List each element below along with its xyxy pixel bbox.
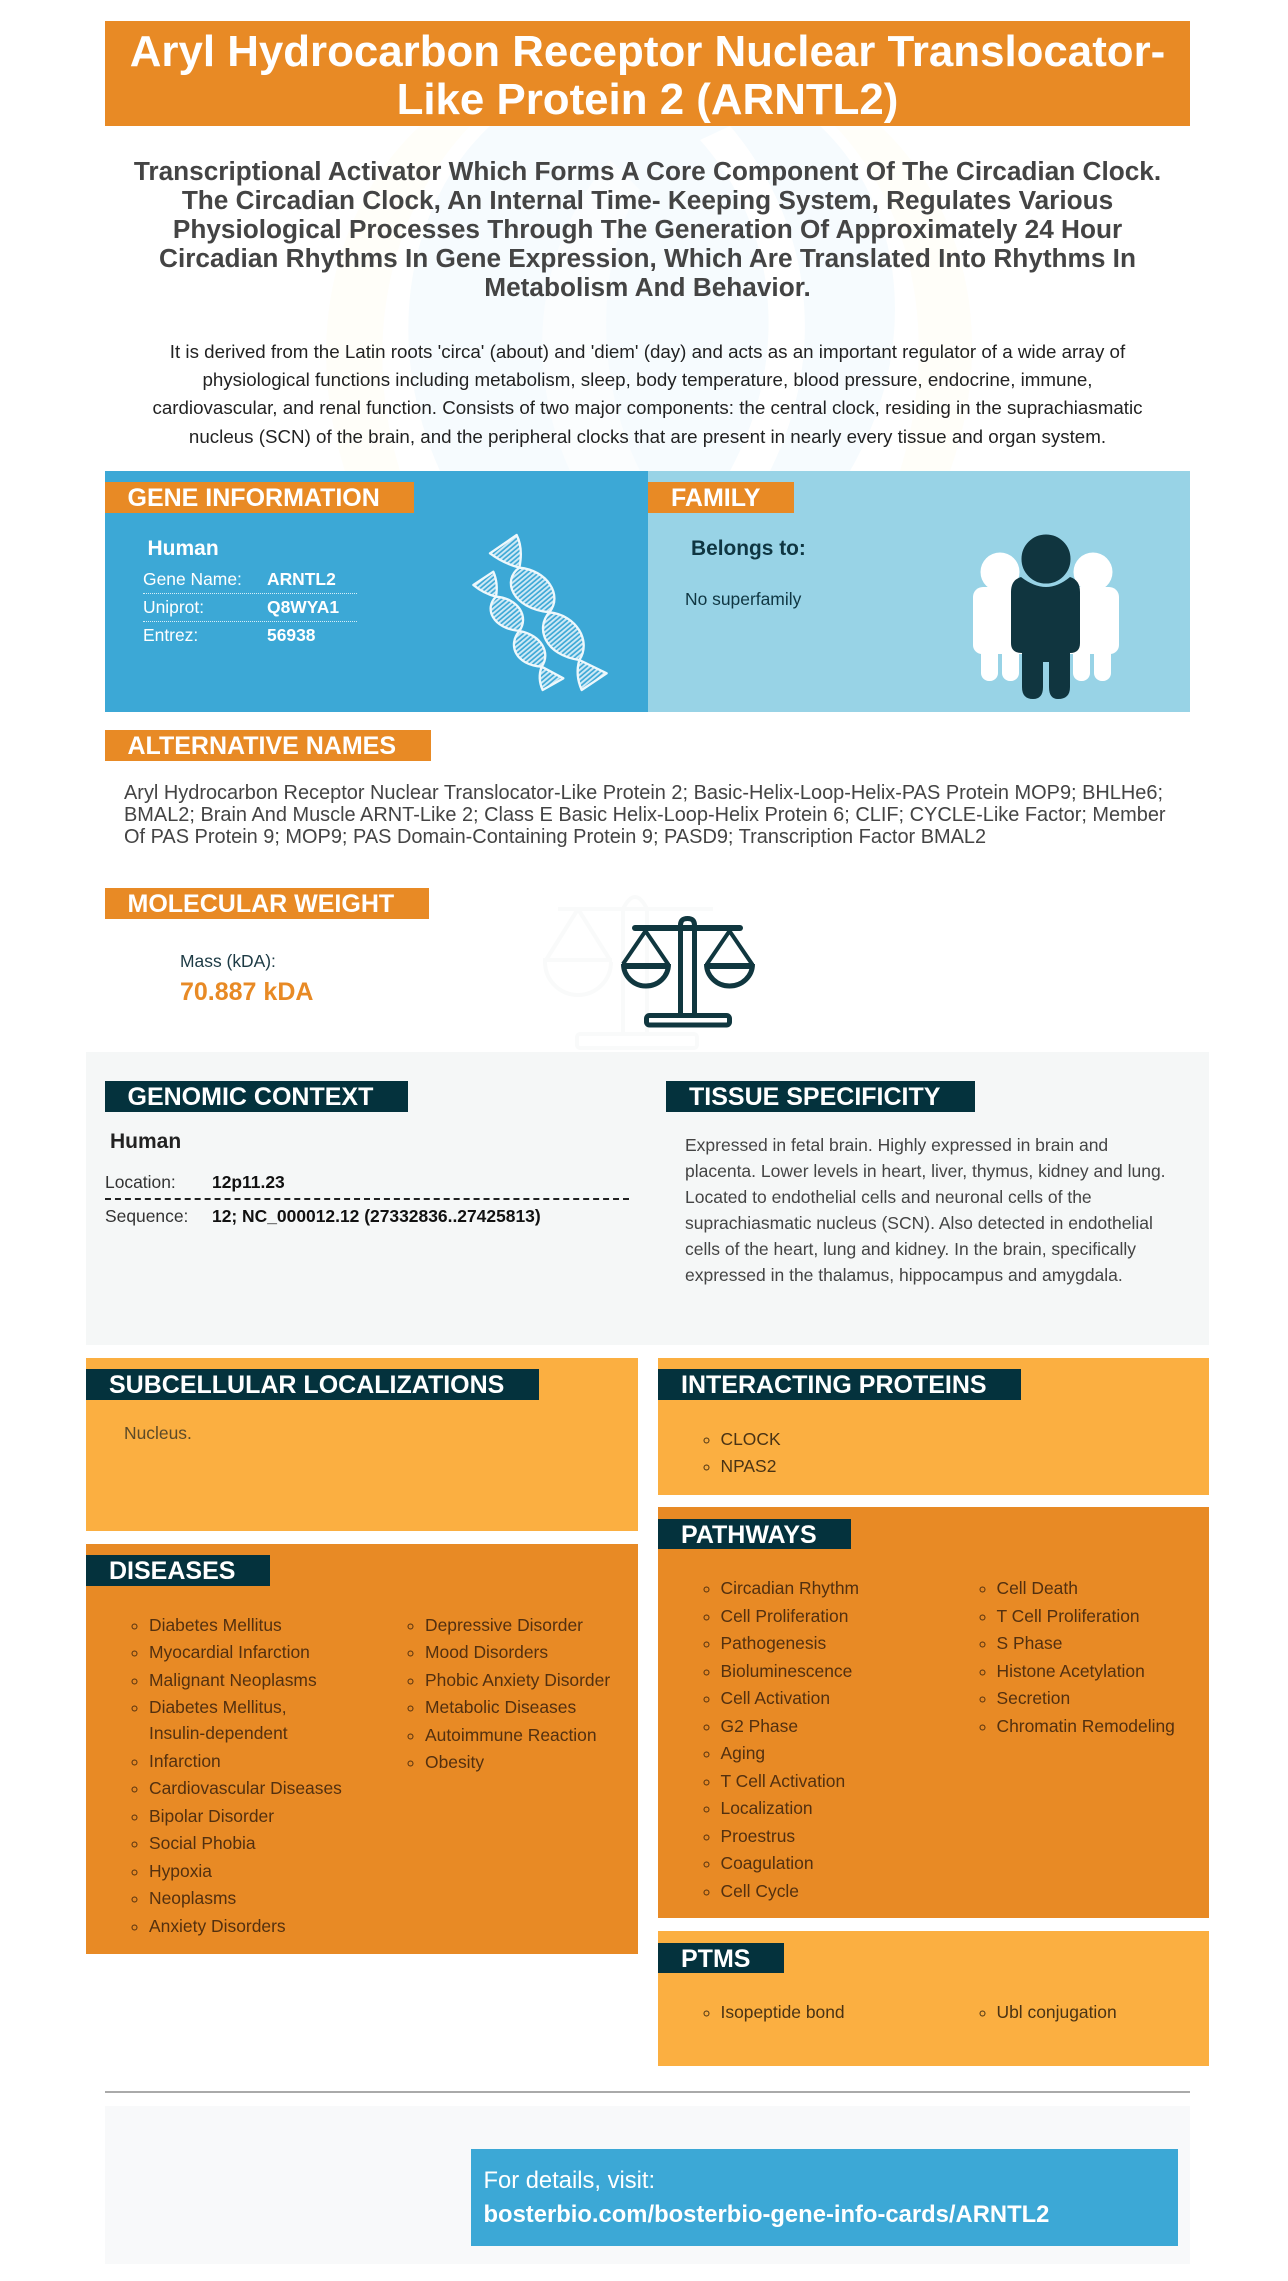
- callout url: bosterbio.com/bosterbio-gene-info-cards/ARNTL2: [484, 2201, 1049, 2228]
- disease list column 2: Obesity: [425, 1752, 484, 1772]
- pathways list column 2: Chromatin Remodeling: [996, 1716, 1175, 1736]
- disease list column 1: Myocardial Infarction: [149, 1642, 310, 1662]
- pathways list column 1: Bioluminescence: [720, 1660, 852, 1680]
- gene name row: [143, 568, 357, 594]
- pathways list column 1: Localization: [720, 1798, 813, 1818]
- tissue specificity text: Located to endothelial cells and neuronal cells of the: [685, 1187, 1092, 1207]
- subtitle: Transcriptional Activator Which Forms A Core Component Of The Circadian Clock.: [134, 156, 1161, 186]
- pathways list column 2: T Cell Proliferation: [996, 1606, 1140, 1626]
- location row: Location:: [105, 1172, 176, 1192]
- heading: diseases: DISEASES: [109, 1557, 235, 1585]
- pathways list column 2: S Phase: [996, 1633, 1062, 1653]
- intro paragraph: nucleus (SCN) of the brain, and the peripheral clocks that are present in nearly every tissue and organ system.: [189, 426, 1106, 447]
- heading: pathways: PATHWAYS: [681, 1521, 817, 1549]
- panel: ptms: [658, 1931, 1209, 2066]
- panel: genomic context and tissue specificity: 12p11.23: [212, 1172, 285, 1192]
- background watermark: [408, 126, 894, 471]
- heading: molecular weight: MOLECULAR WEIGHT: [128, 890, 394, 918]
- alternative names text: [124, 782, 1166, 848]
- pathways list column 1: Cell Proliferation: [720, 1606, 848, 1626]
- heading: family: FAMILY: [671, 484, 760, 512]
- heading: genomic context: GENOMIC CONTEXT: [128, 1083, 373, 1111]
- tissue specificity text: suprachiasmatic nucleus (SCN). Also detected in endothelial: [685, 1213, 1153, 1233]
- intro paragraph: It is derived from the Latin roots 'circa' (about) and 'diem' (day) and acts as an important regulator of a wide array of: [170, 341, 1125, 362]
- panel: gene information: [105, 471, 648, 712]
- disease list column 1: Malignant Neoplasms: [149, 1670, 317, 1690]
- tissue specificity text: [685, 1135, 1166, 1285]
- heading: ptms: PTMS: [681, 1945, 750, 1973]
- alternative names text: Of PAS Protein 9; MOP9; PAS Domain-Containing Protein 9; PASD9; Transcription Factor BMAL2: [124, 826, 986, 848]
- sequence row: Sequence:: [105, 1206, 188, 1226]
- tissue specificity text: placenta. Lower levels in heart, liver, thymus, kidney and lung.: [685, 1161, 1166, 1181]
- intro paragraph: [152, 341, 1143, 447]
- pathways list column 1: [704, 1578, 859, 1900]
- panel: diseases: [86, 1544, 638, 1954]
- heading: tissue specificity: TISSUE SPECIFICITY: [689, 1083, 940, 1111]
- disease list column 1: Diabetes Mellitus: [149, 1614, 282, 1634]
- callout: details link: [471, 2149, 1178, 2246]
- heading: ptms: [658, 1943, 784, 1973]
- interacting proteins list: NPAS2: [720, 1456, 776, 1476]
- ptm list column 2: Ubl conjugation: [996, 2002, 1117, 2022]
- heading: family: [648, 482, 794, 513]
- pathways list column 1: Coagulation: [720, 1853, 814, 1873]
- mass value: 70.887 kDA: [180, 978, 313, 1006]
- panel: family: [648, 471, 1190, 712]
- disease list column 2: [408, 1614, 610, 1772]
- gene name row: Gene Name:: [143, 569, 242, 589]
- entrez row: Entrez:: [143, 625, 198, 645]
- disease list column 1: Diabetes Mellitus,: [149, 1697, 287, 1717]
- icon: dna helix: [472, 534, 608, 692]
- disease list column 1: [132, 1614, 342, 1936]
- disease list column 2: Depressive Disorder: [425, 1614, 583, 1634]
- panel: interacting proteins: [658, 1358, 1209, 1495]
- heading: pathways: [658, 1519, 851, 1549]
- panel: pathways: [658, 1507, 1209, 1918]
- disease list column 2: Metabolic Diseases: [425, 1697, 576, 1717]
- pathways list column 1: Pathogenesis: [720, 1633, 826, 1653]
- uniprot row: [143, 596, 357, 622]
- disease list column 2: Autoimmune Reaction: [425, 1724, 597, 1744]
- disease list column 1: Cardiovascular Diseases: [149, 1778, 342, 1798]
- disease list column 1: Hypoxia: [149, 1860, 212, 1880]
- pathways list column 2: [980, 1578, 1175, 1736]
- subtitle: The Circadian Clock, An Internal Time- Keeping System, Regulates Various: [182, 185, 1113, 215]
- pathways list column 1: Cell Activation: [720, 1688, 830, 1708]
- pathways list column 2: Cell Death: [996, 1578, 1078, 1598]
- intro paragraph: cardiovascular, and renal function. Consists of two major components: the central clock, residing in the suprachiasmatic: [152, 397, 1143, 418]
- pathways list column 1: Cell Cycle: [720, 1880, 799, 1900]
- icon: people: [973, 534, 1119, 699]
- tissue specificity text: expressed in the thalamus, hippocampus and amygdala.: [685, 1265, 1123, 1285]
- subtitle: [134, 156, 1161, 302]
- panel: subcellular localizations: [86, 1358, 638, 1531]
- intro paragraph: physiological functions including metabolism, sleep, body temperature, blood pressure, endocrine, immune,: [202, 369, 1093, 390]
- entrez row: [143, 625, 316, 645]
- species label: Human: [148, 537, 219, 560]
- disease list column 1: Bipolar Disorder: [149, 1806, 274, 1826]
- callout label: For details, visit:: [484, 2167, 655, 2194]
- alternative names text: BMAL2; Brain And Muscle ARNT-Like 2; Class E Basic Helix-Loop-Helix Protein 6; CLIF; CYCLE-Like Factor; Member: [124, 804, 1166, 826]
- title: Like Protein 2 (ARNTL2): [397, 75, 898, 124]
- entrez row: 56938: [267, 625, 316, 645]
- pathways list column 1: Aging: [720, 1743, 765, 1763]
- disease list column 1: Anxiety Disorders: [149, 1916, 286, 1936]
- localization text: Nucleus.: [124, 1423, 192, 1443]
- disease list column 1: Insulin-dependent: [149, 1723, 288, 1743]
- subtitle: Metabolism And Behavior.: [484, 272, 811, 302]
- disease list column 2: Mood Disorders: [425, 1642, 548, 1662]
- icon: ghost balance scale: [540, 890, 720, 1052]
- uniprot row: Q8WYA1: [267, 597, 339, 617]
- interacting proteins list: CLOCK: [720, 1428, 781, 1448]
- pathways list column 2: Secretion: [996, 1688, 1070, 1708]
- heading: alternative names: ALTERNATIVE NAMES: [128, 732, 396, 760]
- heading: diseases: [86, 1555, 270, 1586]
- tissue specificity text: cells of the heart, lung and kidney. In the brain, specifically: [685, 1239, 1136, 1259]
- ptm list column 1: Isopeptide bond: [720, 2002, 845, 2022]
- heading: gene information: GENE INFORMATION: [128, 484, 380, 512]
- disease list column 2: Phobic Anxiety Disorder: [425, 1670, 610, 1690]
- disease list column 1: Social Phobia: [149, 1833, 256, 1853]
- disease list column 1: Infarction: [149, 1750, 221, 1770]
- species label: Human: [110, 1130, 181, 1153]
- pathways list column 1: T Cell Activation: [720, 1770, 845, 1790]
- pathways list column 1: Circadian Rhythm: [720, 1578, 859, 1598]
- uniprot row: Uniprot:: [143, 597, 204, 617]
- icon: balance scale: [621, 916, 755, 1028]
- gene name row: ARNTL2: [267, 569, 336, 589]
- location row: [105, 1172, 285, 1192]
- heading: interacting proteins: INTERACTING PROTEINS: [681, 1371, 987, 1399]
- interacting proteins list: [704, 1428, 781, 1476]
- pathways list column 1: G2 Phase: [720, 1716, 798, 1736]
- alternative names text: Aryl Hydrocarbon Receptor Nuclear Translocator-Like Protein 2; Basic-Helix-Loop-Helix-PAS Protein MOP9; BHLHe6;: [124, 782, 1163, 804]
- pathways list column 2: Histone Acetylation: [996, 1660, 1145, 1680]
- tissue specificity text: Expressed in fetal brain. Highly expressed in brain and: [685, 1135, 1108, 1155]
- disease list column 1: Neoplasms: [149, 1888, 236, 1908]
- subtitle: Circadian Rhythms In Gene Expression, Which Are Translated Into Rhythms In: [159, 243, 1136, 273]
- subtitle: Physiological Processes Through The Generation Of Approximately 24 Hour: [173, 214, 1122, 244]
- title: [105, 21, 1190, 126]
- heading: subcellular localizations: SUBCELLULAR LOCALIZATIONS: [109, 1371, 504, 1399]
- sequence row: 12; NC_000012.12 (27332836..27425813): [212, 1206, 541, 1226]
- sequence row: [105, 1198, 629, 1227]
- pathways list column 1: Proestrus: [720, 1826, 795, 1846]
- panel: genomic context and tissue specificity: [86, 1052, 1209, 1345]
- family value: No superfamily: [685, 589, 801, 609]
- title: Aryl Hydrocarbon Receptor Nuclear Translocator-: [130, 27, 1165, 76]
- belongs to label: Belongs to:: [691, 537, 806, 560]
- panel: footer: [105, 2106, 1190, 2264]
- mass label: Mass (kDA):: [180, 951, 276, 971]
